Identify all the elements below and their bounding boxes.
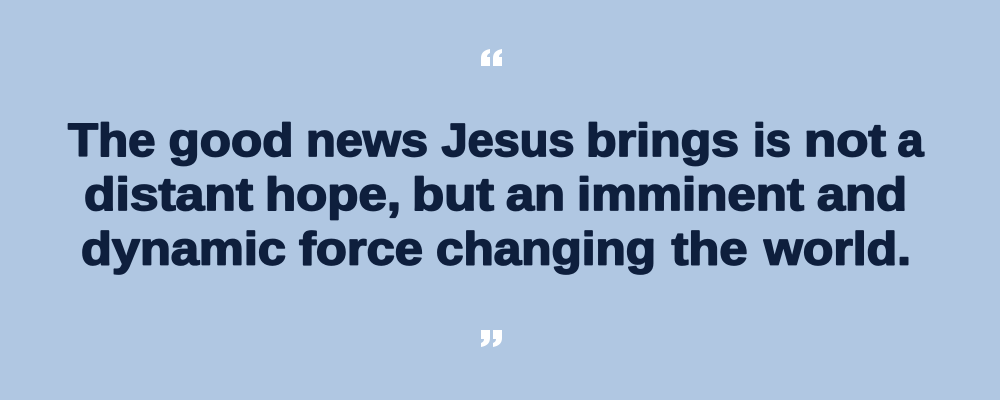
- icon: closing quotation mark: [481, 330, 502, 347]
- quote line 1: brings: [586, 114, 739, 166]
- quote line 3: changing: [436, 222, 656, 274]
- quote line 2: hope,: [265, 168, 401, 220]
- quote line 1: Jesus: [442, 114, 574, 166]
- quote line 1: a: [898, 114, 924, 166]
- quote line 1: not: [804, 114, 886, 166]
- quote line 1: news: [306, 114, 428, 166]
- quote line 2: distant: [84, 168, 253, 220]
- quote line 3: [81, 222, 911, 274]
- quote line 1: good: [168, 114, 294, 166]
- quote line 1: [68, 114, 924, 166]
- quote line 3: world.: [763, 222, 911, 274]
- quote line 2: an: [506, 168, 565, 220]
- icon: opening quotation mark: [481, 49, 502, 66]
- quote line 3: dynamic: [81, 222, 286, 274]
- quote text: [68, 114, 924, 274]
- quote line 2: imminent: [577, 168, 804, 220]
- quote line 2: but: [412, 168, 494, 220]
- quote line 2: and: [817, 168, 907, 220]
- quote line 1: is: [753, 114, 791, 166]
- quote line 1: The: [68, 114, 156, 166]
- quote line 3: the: [672, 222, 748, 274]
- quote line 3: force: [299, 222, 423, 274]
- quote line 2: [84, 168, 907, 220]
